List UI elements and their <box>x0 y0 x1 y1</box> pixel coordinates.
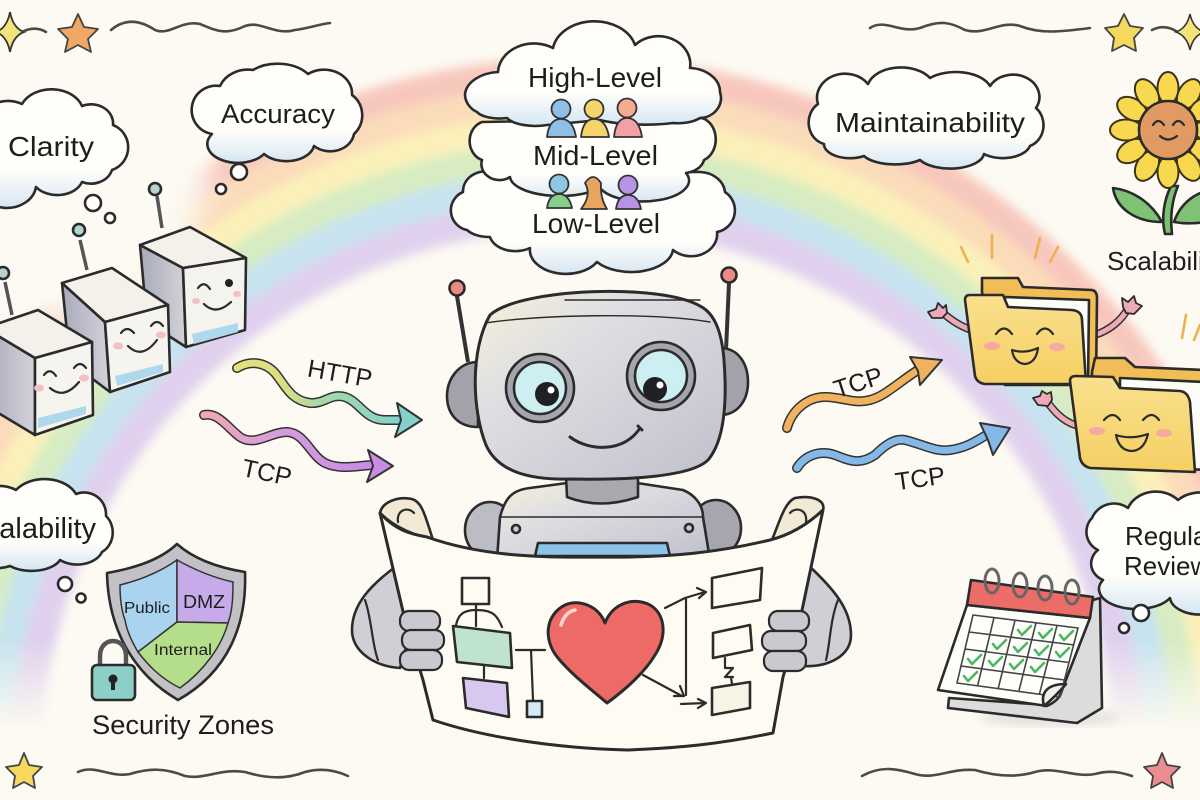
cloud: Regular Review <box>1086 492 1200 633</box>
arrow: HTTP: HTTP <box>305 355 374 393</box>
calendar page curl <box>1043 684 1066 706</box>
calendar shadow <box>980 710 1120 726</box>
robot left eye <box>506 354 574 422</box>
cloud: Clarity: Clarity <box>8 131 94 162</box>
server 3 <box>140 183 246 347</box>
robot smile <box>570 426 642 447</box>
cloud: Mid-Level <box>470 118 716 201</box>
arrow: TCP upper right <box>787 357 942 428</box>
robot right eye <box>627 342 695 410</box>
zone labels: DMZ <box>183 592 225 612</box>
folder 2 <box>1033 358 1200 472</box>
robot chest panel <box>535 543 670 556</box>
top-left border decoration <box>0 12 330 52</box>
bottom-right border decoration <box>862 753 1180 788</box>
arrow: HTTP <box>237 355 422 437</box>
petals <box>1110 72 1200 188</box>
arrow: TCP lower right <box>797 423 1010 496</box>
cloud: High-Level <box>465 21 721 126</box>
zone labels: Internal <box>154 642 212 659</box>
zone labels <box>124 592 225 659</box>
arrow: TCP upper right: TCP <box>830 362 886 404</box>
right hand <box>762 611 809 671</box>
cloud: Accuracy <box>192 64 362 194</box>
server robots <box>0 183 246 435</box>
cloud: Low-Level <box>451 171 735 274</box>
calendar rings <box>985 569 1079 604</box>
robot ears <box>447 362 478 427</box>
server 2 <box>62 224 170 392</box>
scroll right curl <box>772 497 823 540</box>
cloud: Low-Level: Low-Level <box>532 208 660 239</box>
padlock icon <box>92 641 135 700</box>
people: mid-level row <box>547 174 641 209</box>
robot arms <box>352 565 851 668</box>
cloud: Accuracy: Accuracy <box>221 99 335 129</box>
shield outer <box>107 544 245 700</box>
arrow: TCP lower right: TCP <box>893 462 947 496</box>
zone labels: Public <box>124 600 170 617</box>
sunflower <box>1110 72 1200 234</box>
people: high-level row <box>547 98 642 137</box>
folder 1 <box>928 278 1142 385</box>
cloud: Maintainability: Maintainability <box>835 107 1025 138</box>
blueprint scroll <box>380 497 823 750</box>
arrow: TCP left: TCP <box>239 454 294 492</box>
cloud: Mid-Level: Mid-Level <box>533 140 658 171</box>
calendar header <box>967 580 1093 618</box>
zone: internal <box>138 622 228 688</box>
stem and leaves <box>1113 186 1200 234</box>
cloud: Scalability left <box>0 479 113 602</box>
calendar page <box>938 605 1090 706</box>
robot <box>352 268 851 668</box>
diagram right flow <box>643 568 762 715</box>
flower face <box>1139 101 1197 159</box>
calendar grid <box>957 615 1078 697</box>
zone: public <box>120 560 177 652</box>
happy folders <box>928 235 1200 472</box>
robot shoulders <box>465 500 741 558</box>
security zones shield <box>92 544 274 740</box>
arrow: TCP left <box>204 415 393 492</box>
bottom-left border decoration <box>6 753 348 788</box>
cloud stack: abstraction levels <box>451 21 735 274</box>
cloud: Clarity <box>0 89 128 223</box>
left hand <box>400 611 444 670</box>
cloud: Maintainability <box>809 67 1044 169</box>
calendar back pages <box>948 598 1102 723</box>
label: Security Zones: Security Zones <box>92 710 274 740</box>
sparkle lines <box>961 235 1200 340</box>
scroll left curl <box>380 498 433 540</box>
calendar checkmarks <box>964 626 1073 681</box>
robot torso <box>497 483 710 560</box>
robot hands <box>400 611 809 671</box>
scroll paper <box>380 510 823 750</box>
robot head <box>475 291 725 479</box>
robot antennas <box>450 268 736 362</box>
top-right border decoration <box>870 14 1200 51</box>
zone: DMZ <box>177 560 233 623</box>
robot neck <box>566 476 638 504</box>
diagram left tree <box>453 578 545 717</box>
server 1 <box>0 267 93 435</box>
heart <box>548 601 663 703</box>
cloud: High-Level: High-Level <box>528 62 662 93</box>
calendar <box>938 569 1120 726</box>
